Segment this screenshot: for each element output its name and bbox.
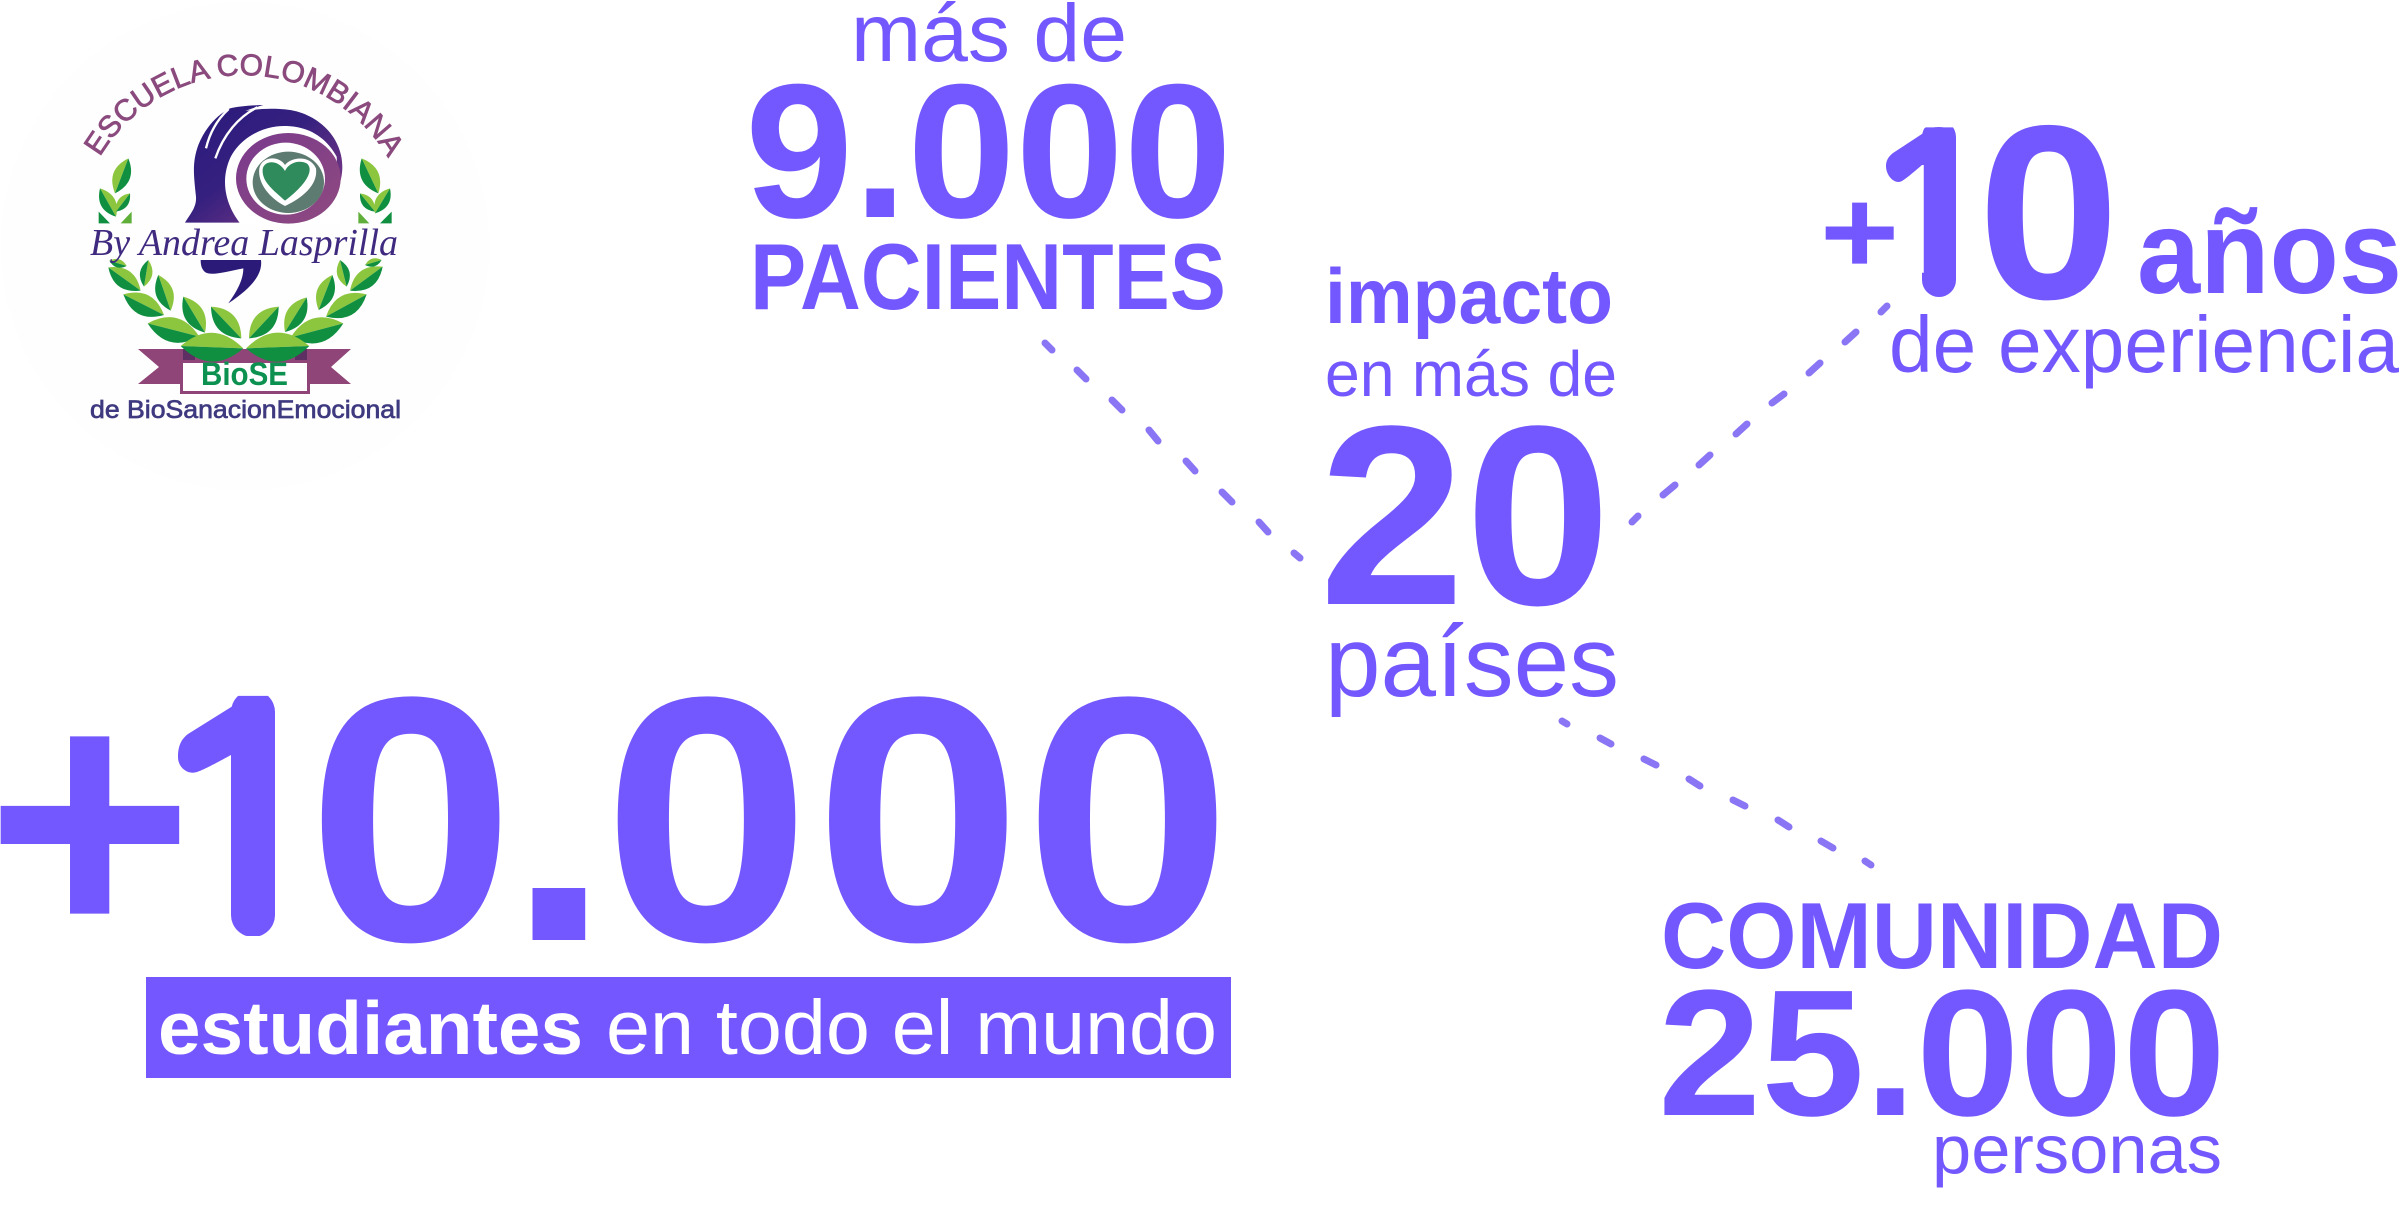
- 25.000: 25.000: [1658, 953, 2226, 1154]
- logo BioSE label: BioSE: [201, 356, 288, 392]
- digit 1 big: 1: [133, 621, 349, 1011]
- dashed connector: 20 to años: [1632, 306, 1887, 522]
- logo: Escuela Colombiana BioSE: [83, 54, 402, 424]
- stat: impacto en más de 20 países: [1319, 252, 1619, 718]
- países: países: [1325, 606, 1619, 718]
- de experiencia: de experiencia: [1889, 300, 2399, 389]
- dashed connector: 20 to comunidad: [1562, 721, 1871, 865]
- banner regular text: en todo el mundo: [606, 985, 1217, 1071]
- impacto: impacto: [1325, 252, 1613, 340]
- logo lower laurel: [103, 256, 388, 363]
- 9.000: 9.000: [745, 45, 1232, 258]
- logo script name: By Andrea Lasprilla: [90, 222, 398, 264]
- digit 1: 1: [1860, 74, 2012, 351]
- dashed connector: pacientes to 20: [1045, 343, 1300, 558]
- logo head and heart spiral: [185, 105, 342, 224]
- plus sign: +: [1820, 165, 1899, 299]
- stat: más de 9.000 pacientes: [745, 0, 1232, 329]
- digits 0.000 big: 0.000: [307, 624, 1232, 1014]
- COMUNIDAD: COMUNIDAD: [1661, 883, 2223, 988]
- digit 1: [1886, 127, 1956, 297]
- 20: 20: [1319, 373, 1611, 659]
- banner: estudiantes en todo el mundo: [146, 977, 1231, 1078]
- logo chin: [201, 260, 261, 303]
- logo arc text: ESCUELA COLOMBIANA: [83, 54, 402, 158]
- digit 1 big: [178, 696, 275, 936]
- stat: +10.000: [0, 696, 1216, 944]
- personas: personas: [1932, 1111, 2222, 1188]
- digit 0: 0: [1978, 74, 2120, 351]
- logo subtitle: de BioSanacionEmocional: [90, 396, 401, 424]
- en más de: en más de: [1325, 338, 1617, 410]
- banner bold text: estudiantes: [158, 986, 583, 1070]
- stat: +10 años de experiencia: [1826, 124, 2399, 388]
- logo upper laurel: [93, 154, 396, 223]
- stat: comunidad 25.000 personas: [1658, 883, 2226, 1188]
- PACIENTES: PACIENTES: [750, 224, 1226, 329]
- logo ribbon: [138, 349, 351, 392]
